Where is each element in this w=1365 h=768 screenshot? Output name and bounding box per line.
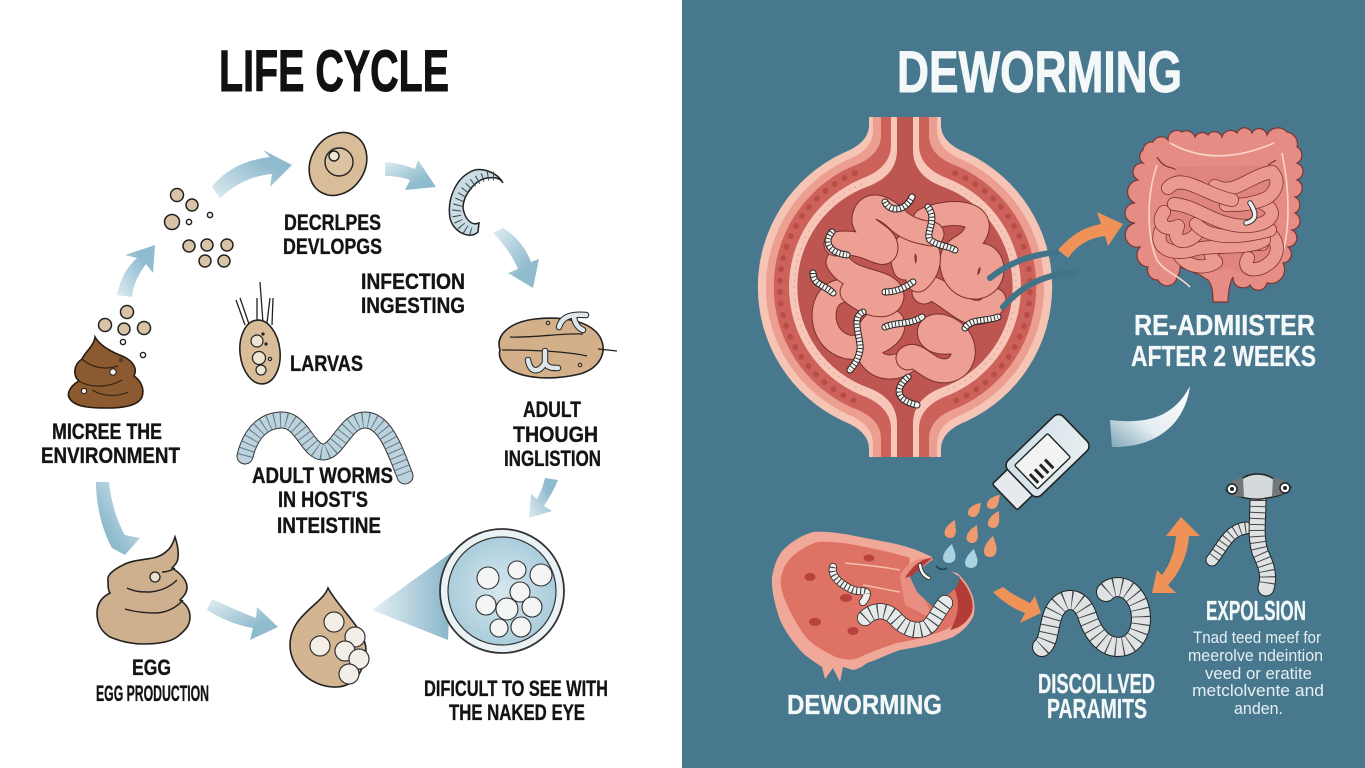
label: adult worms in host's intestine: INTEISTINE bbox=[277, 513, 381, 538]
label: discollved paramits: DISCOLLVED bbox=[1038, 668, 1155, 699]
label: difficult to see bbox=[424, 676, 608, 725]
arrow: orange to colon bbox=[1058, 212, 1123, 258]
arrow: egg to curved larva bbox=[385, 160, 436, 190]
label: adult worms in host's intestine: IN HOST'S bbox=[278, 487, 368, 512]
illustration: colon bbox=[1125, 128, 1303, 302]
arrow: orange double-headed bbox=[1152, 517, 1200, 593]
icon: magnified eggs bbox=[372, 529, 564, 653]
label: infection ingesting: INFECTION bbox=[361, 269, 465, 294]
label: re-administer after 2 weeks: AFTER 2 WEEKS bbox=[1131, 341, 1316, 373]
label: difficult to see: DIFICULT TO SEE WITH bbox=[424, 676, 608, 701]
label: discollved paramits bbox=[1038, 668, 1155, 724]
icon: curved larva bbox=[449, 170, 503, 235]
title: life cycle: LIFE CYCLE bbox=[219, 39, 449, 104]
teal channels leaving the intestine bbox=[990, 252, 1075, 307]
text block: expolsion bbox=[1188, 595, 1324, 718]
text block: expolsion: meerolve ndeintion bbox=[1188, 646, 1323, 665]
arrow: stool to eggs bbox=[117, 245, 155, 297]
small worms in the intestine bbox=[813, 197, 998, 405]
arrow: larva to food bbox=[493, 228, 539, 288]
text block: expolsion: veed or eratite bbox=[1205, 664, 1312, 683]
icon: food with worms bbox=[499, 315, 617, 378]
arrow: tissue to dissolved worm bbox=[993, 587, 1041, 623]
icon: egg cluster bbox=[290, 588, 369, 687]
label: re-administer after 2 weeks bbox=[1131, 310, 1316, 373]
label: infection ingesting bbox=[361, 269, 465, 318]
label: difficult to see: THE NAKED EYE bbox=[449, 700, 585, 725]
label: adult though inglistion: ADULT bbox=[523, 397, 581, 422]
text block: expolsion: EXPOLSION bbox=[1206, 595, 1306, 626]
label: adult worms in host's intestine: ADULT WORMS bbox=[252, 463, 393, 488]
panel: deworming bbox=[682, 0, 1365, 768]
label: adult though inglistion: THOUGH bbox=[513, 422, 598, 447]
title: deworming: DEWORMING bbox=[897, 40, 1182, 105]
label: decrlpes devlopgs: DEVLOPGS bbox=[283, 234, 382, 259]
text block: expolsion: Tnad teed meef for bbox=[1193, 628, 1321, 647]
label: larvas: LARVAS bbox=[290, 351, 363, 376]
icon: dark stool with eggs bbox=[68, 306, 150, 408]
label: infection ingesting: INGESTING bbox=[361, 293, 465, 318]
label: deworming: DEWORMING bbox=[787, 689, 942, 720]
icon: tan stool bbox=[97, 537, 190, 644]
label: egg production: EGG bbox=[132, 655, 171, 680]
arrow: tan stool to egg cluster bbox=[207, 599, 278, 640]
label: adult worms in host's intestine bbox=[252, 463, 393, 538]
label: micree the environment bbox=[41, 419, 180, 468]
icon: worm with head bbox=[1212, 474, 1291, 588]
text block: expolsion: metclolvente and bbox=[1192, 681, 1324, 700]
icon: adult worm bbox=[245, 420, 405, 476]
intestinal loops bbox=[824, 207, 994, 371]
label: micree the environment: MICREE THE bbox=[52, 419, 162, 444]
illustration: tissue with expelled worms bbox=[772, 532, 974, 682]
arrow: food to magnified eggs bbox=[529, 478, 558, 518]
label: micree the environment: ENVIRONMENT bbox=[41, 443, 180, 468]
label: adult though inglistion: INGLISTION bbox=[504, 446, 601, 471]
icon: medicine bottle bbox=[988, 412, 1092, 514]
icon: dissolved worm bbox=[1042, 587, 1141, 647]
icon: scattered eggs bbox=[164, 188, 233, 267]
arrow: white return curve bbox=[1110, 386, 1190, 447]
icon: larva bbox=[236, 282, 283, 386]
icon: medicine droplets bbox=[943, 495, 1000, 568]
label: decrlpes devlopgs: DECRLPES bbox=[284, 210, 381, 235]
illustration: intestine cross-section bbox=[758, 117, 1052, 457]
label: discollved paramits: PARAMITS bbox=[1047, 693, 1147, 724]
label: decrlpes devlopgs bbox=[283, 210, 382, 259]
arrow: environment to tan stool bbox=[96, 482, 140, 555]
text block: expolsion: anden. bbox=[1234, 699, 1283, 718]
arrow: eggs to large egg bbox=[212, 150, 292, 198]
label: egg production: EGG PRODUCTION bbox=[96, 681, 209, 706]
label: adult though inglistion bbox=[504, 397, 601, 471]
label: egg production bbox=[96, 655, 209, 706]
label: re-administer after 2 weeks: RE-ADMIISTER bbox=[1134, 310, 1315, 342]
icon: large egg bbox=[298, 122, 378, 206]
panel: life cycle bbox=[0, 0, 682, 768]
